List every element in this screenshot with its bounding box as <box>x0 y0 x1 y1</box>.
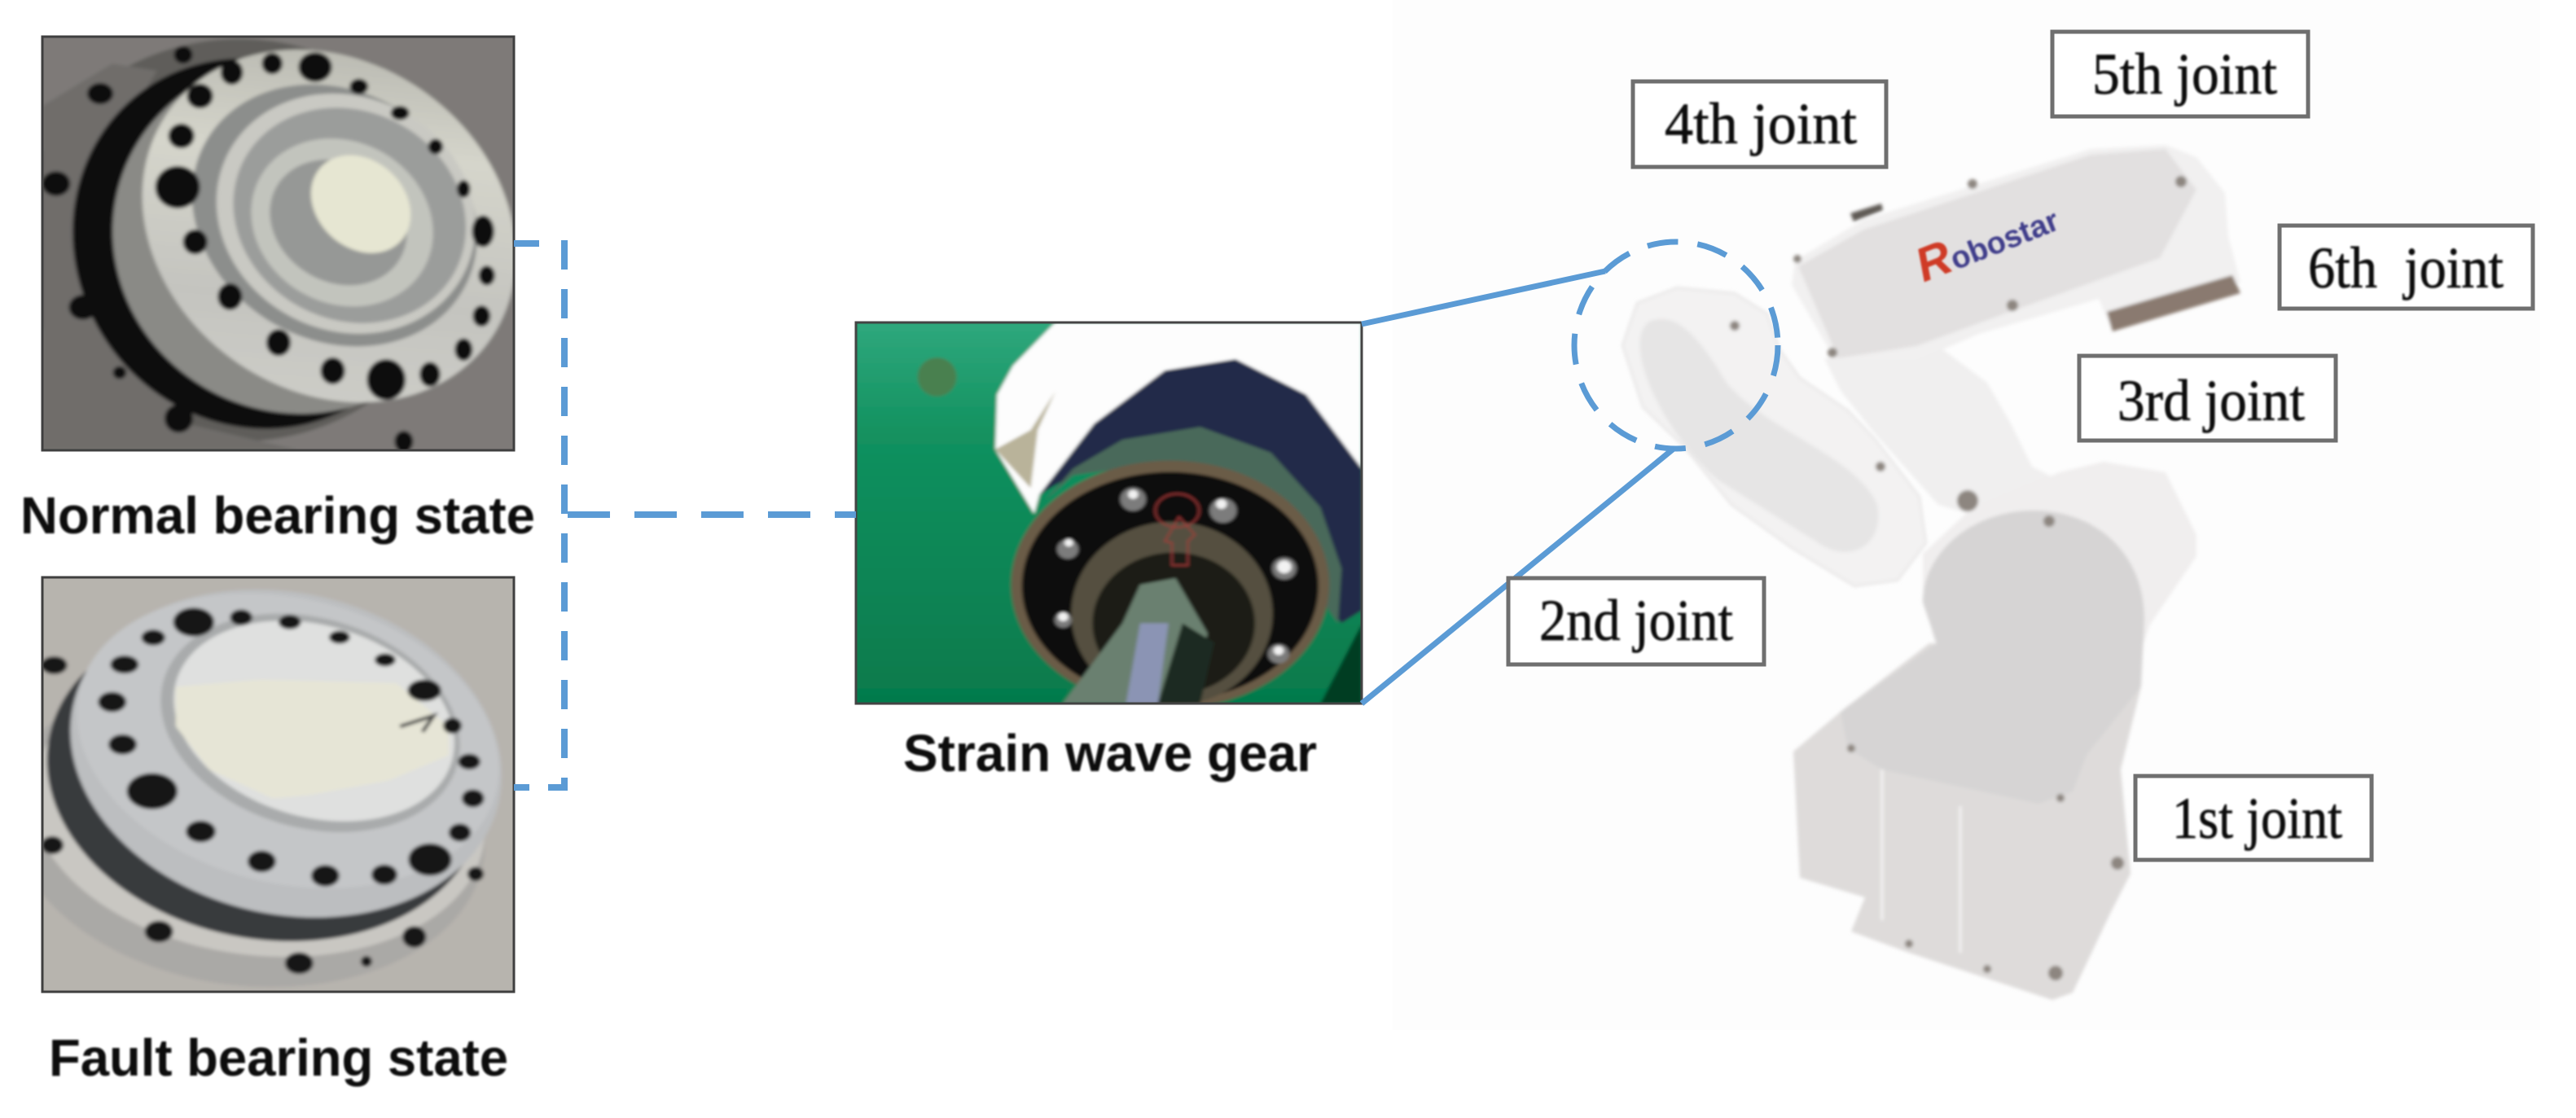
robot arm illustration <box>1622 145 2240 1000</box>
label: 3rd joint <box>2079 356 2336 441</box>
label: 4th joint <box>1633 81 1886 167</box>
label: 1st joint: 1st joint <box>2172 786 2342 851</box>
label: 3rd joint: 3rd joint <box>2117 368 2305 433</box>
third-joint connector <box>1824 346 2060 521</box>
wrist flange <box>2107 275 2240 331</box>
photo: normal bearing state <box>41 36 515 451</box>
torso front panel and shoulder disc <box>1841 511 2144 804</box>
label: 1st joint <box>2135 776 2372 860</box>
label: 5th joint: 5th joint <box>2092 42 2277 107</box>
forearm side panel <box>1798 149 2196 358</box>
second link <box>1622 287 1926 586</box>
photo: fault bearing state <box>41 577 515 993</box>
screws <box>1730 176 2187 980</box>
callout lines from gear photo to joint <box>1362 271 1674 704</box>
heading: normal bearing state: Normal bearing state <box>20 486 535 545</box>
heading: fault bearing state: Fault bearing state <box>49 1028 508 1087</box>
label: 2nd joint <box>1508 578 1764 664</box>
shoulder housing <box>1923 462 2196 651</box>
label: 2nd joint: 2nd joint <box>1539 588 1733 653</box>
heading: strain wave gear: Strain wave gear <box>903 724 1317 783</box>
callout: dashed circle on joint <box>1574 242 1778 449</box>
forearm <box>1792 145 2240 361</box>
logo: Robostar: Robostar <box>1908 189 2065 292</box>
robot base <box>1793 643 2141 1000</box>
label: 6th joint <box>2280 226 2533 309</box>
photo: strain wave gear bearing <box>856 322 1362 708</box>
label: 6th joint: 6th joint <box>2308 235 2504 300</box>
label: 4th joint: 4th joint <box>1665 91 1857 156</box>
label: 5th joint <box>2052 32 2308 116</box>
dashed connector: bearing photos to strain wave gear <box>514 240 856 787</box>
second link recessed panel <box>1640 319 1878 552</box>
